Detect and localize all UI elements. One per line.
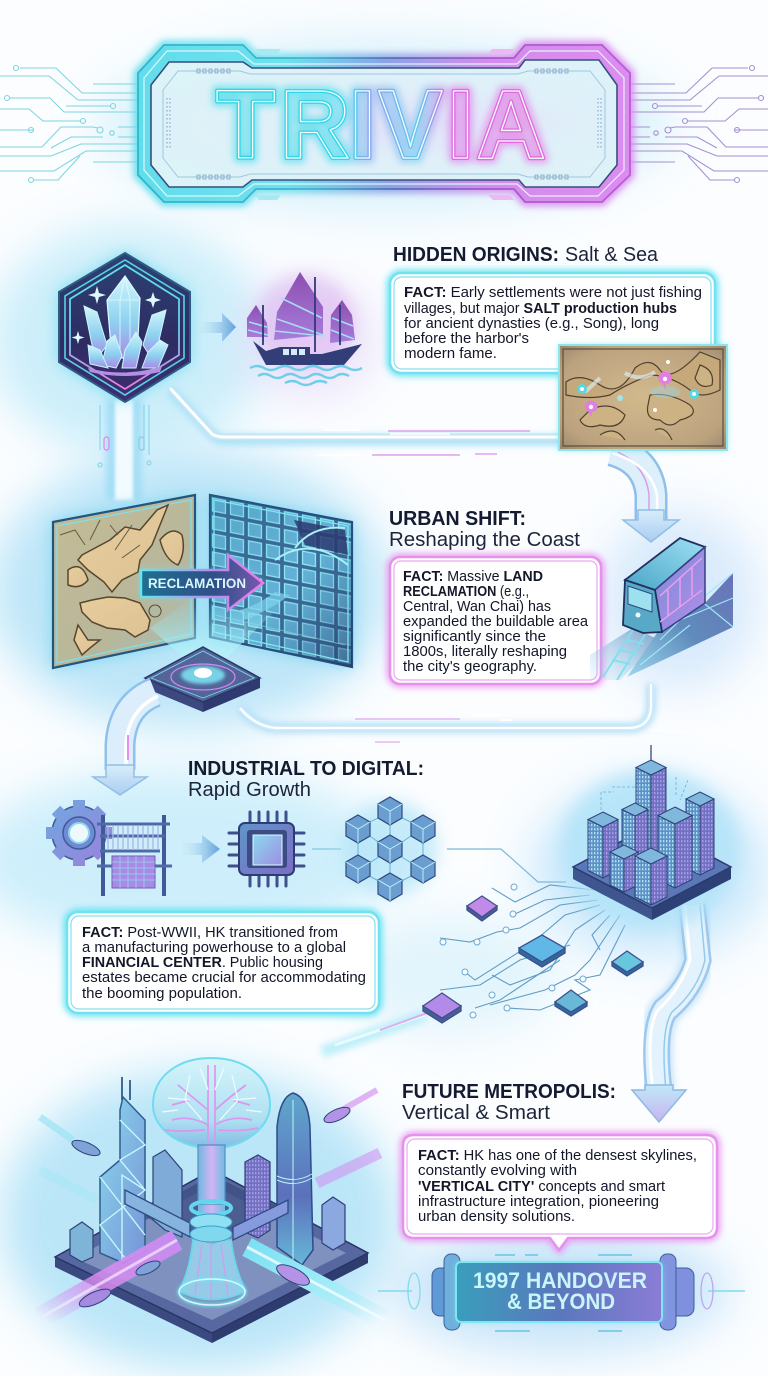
connector: platform to next section (120, 684, 651, 770)
data beams behind the platform (40, 1090, 380, 1200)
heading: future metropolis: FUTURE METROPOLIS: (402, 1081, 616, 1103)
panel: fact financial center: FACT: Post-WWII, HK transitioned from (82, 925, 338, 941)
arrow: reclamation: RECLAMATION (148, 576, 246, 591)
panel: fact vertical city (403, 1135, 717, 1250)
connector: chip to network (312, 848, 341, 850)
title: TRIVIA neon text: TRIVIA (216, 70, 546, 179)
connector: network to city (447, 849, 566, 882)
bank of china tower (100, 1077, 145, 1263)
ifc tower (277, 1093, 313, 1265)
circuit traces: left of title (0, 66, 137, 182)
title frame (138, 45, 630, 202)
panel: fact vertical city: constantly evolving with (418, 1163, 577, 1179)
platform light beams (40, 1240, 385, 1320)
heading: urban shift: URBAN SHIFT: (389, 508, 526, 530)
panel: fact financial center: a manufacturing powerhouse to a global (82, 940, 346, 956)
map: modern grid panel (210, 495, 352, 667)
panel: fact land reclamation: expanded the buildable area (403, 614, 589, 630)
circuit traces: right of title (631, 66, 768, 182)
platform (55, 1170, 368, 1343)
panel: fact land reclamation: RECLAMATION (e.g., (403, 584, 529, 600)
heading: hidden origins: HIDDEN ORIGINS: (393, 244, 559, 266)
title: TRIVIA neon text: TRIVIA (216, 70, 546, 179)
mid-rise buildings (70, 1150, 345, 1262)
panel: fact salt: for ancient dynasties (e.g., Song), long (404, 316, 659, 332)
heading: industrial to digital: Rapid Growth (188, 779, 311, 801)
connector: hexagon to map and down to arrow (170, 388, 657, 520)
panel: fact salt: FACT: Early settlements were not just fishing (404, 285, 702, 301)
panel: fact land reclamation: FACT: Massive LAND (403, 569, 543, 585)
skybridges (125, 1190, 288, 1240)
icon: isometric skyscraper city (560, 745, 740, 930)
flying cars (70, 1104, 352, 1310)
icon: cube network (342, 797, 438, 901)
heading: industrial to digital (188, 758, 424, 801)
capsule: 1997 handover and beyond: 1997 HANDOVER (473, 1268, 647, 1293)
heading: hidden origins (393, 244, 659, 266)
heading: future metropolis: Vertical & Smart (402, 1102, 550, 1124)
panel: fact financial center: estates became crucial for accommodating (82, 970, 366, 986)
holographic tree crown (153, 1058, 270, 1147)
arrow: reclamation (141, 555, 263, 610)
panel: fact land reclamation (390, 557, 601, 684)
title: TRIVIA neon text: TRIVIA (216, 70, 546, 179)
icon: microchip (229, 812, 304, 886)
arrow: crystal to junk (198, 313, 236, 342)
heading: urban shift (389, 508, 580, 551)
arrow: down to future (632, 1085, 686, 1122)
panel: fact vertical city: FACT: HK has one of the densest skylines, (418, 1148, 697, 1164)
panel: fact vertical city: urban density solutions. (418, 1209, 575, 1225)
panel: fact financial center: FINANCIAL CENTER. Public housing (82, 955, 323, 971)
pipe: hexagon down to maps (98, 400, 151, 500)
map: old coast parchment panel (53, 495, 195, 668)
panel: fact land reclamation: Central, Wan Chai) has (403, 599, 551, 615)
heading: hidden origins: Salt & Sea (565, 244, 659, 266)
map: parchment with pins (559, 345, 727, 450)
arrow: down to urban shift (623, 510, 679, 542)
capsule: 1997 handover and beyond (378, 1254, 745, 1331)
icon: future city with data tree (40, 1058, 385, 1343)
capsule: 1997 handover and beyond: & BEYOND (507, 1289, 615, 1314)
icon: train on track (590, 538, 733, 680)
circuit board traces and chips (322, 884, 643, 1052)
heading: industrial to digital: INDUSTRIAL TO DIGITAL: (188, 758, 424, 780)
pipe: city down to future (650, 905, 705, 1090)
panel: fact land reclamation: the city's geography. (403, 659, 537, 675)
heading: urban shift: Reshaping the Coast (389, 529, 580, 551)
heading: future metropolis (402, 1081, 616, 1124)
icon: junk boat (247, 272, 362, 385)
panel: fact salt: villages, but major SALT production hubs (404, 301, 677, 317)
panel: fact vertical city: 'VERTICAL CITY' concepts and smart (418, 1179, 665, 1195)
projector base and light beam (145, 600, 273, 712)
panel: fact salt: modern fame. (404, 346, 497, 362)
panel: fact salt (390, 273, 715, 373)
panel: fact vertical city: infrastructure integration, pioneering (418, 1194, 659, 1210)
panel: fact salt: before the harbor's (404, 331, 529, 347)
panel: fact land reclamation: significantly since the (403, 629, 546, 645)
icon: gear and loom (46, 800, 172, 896)
panel: fact financial center: the booming population. (82, 986, 242, 1002)
icon: salt crystal hexagon badge (59, 253, 190, 402)
panel: fact financial center (67, 912, 379, 1013)
glowing trunk and rings (179, 1145, 246, 1305)
arrow: down to industrial (93, 765, 147, 795)
panel: fact land reclamation: 1800s, literally reshaping (403, 644, 567, 660)
arrow: loom to chip (182, 835, 220, 863)
